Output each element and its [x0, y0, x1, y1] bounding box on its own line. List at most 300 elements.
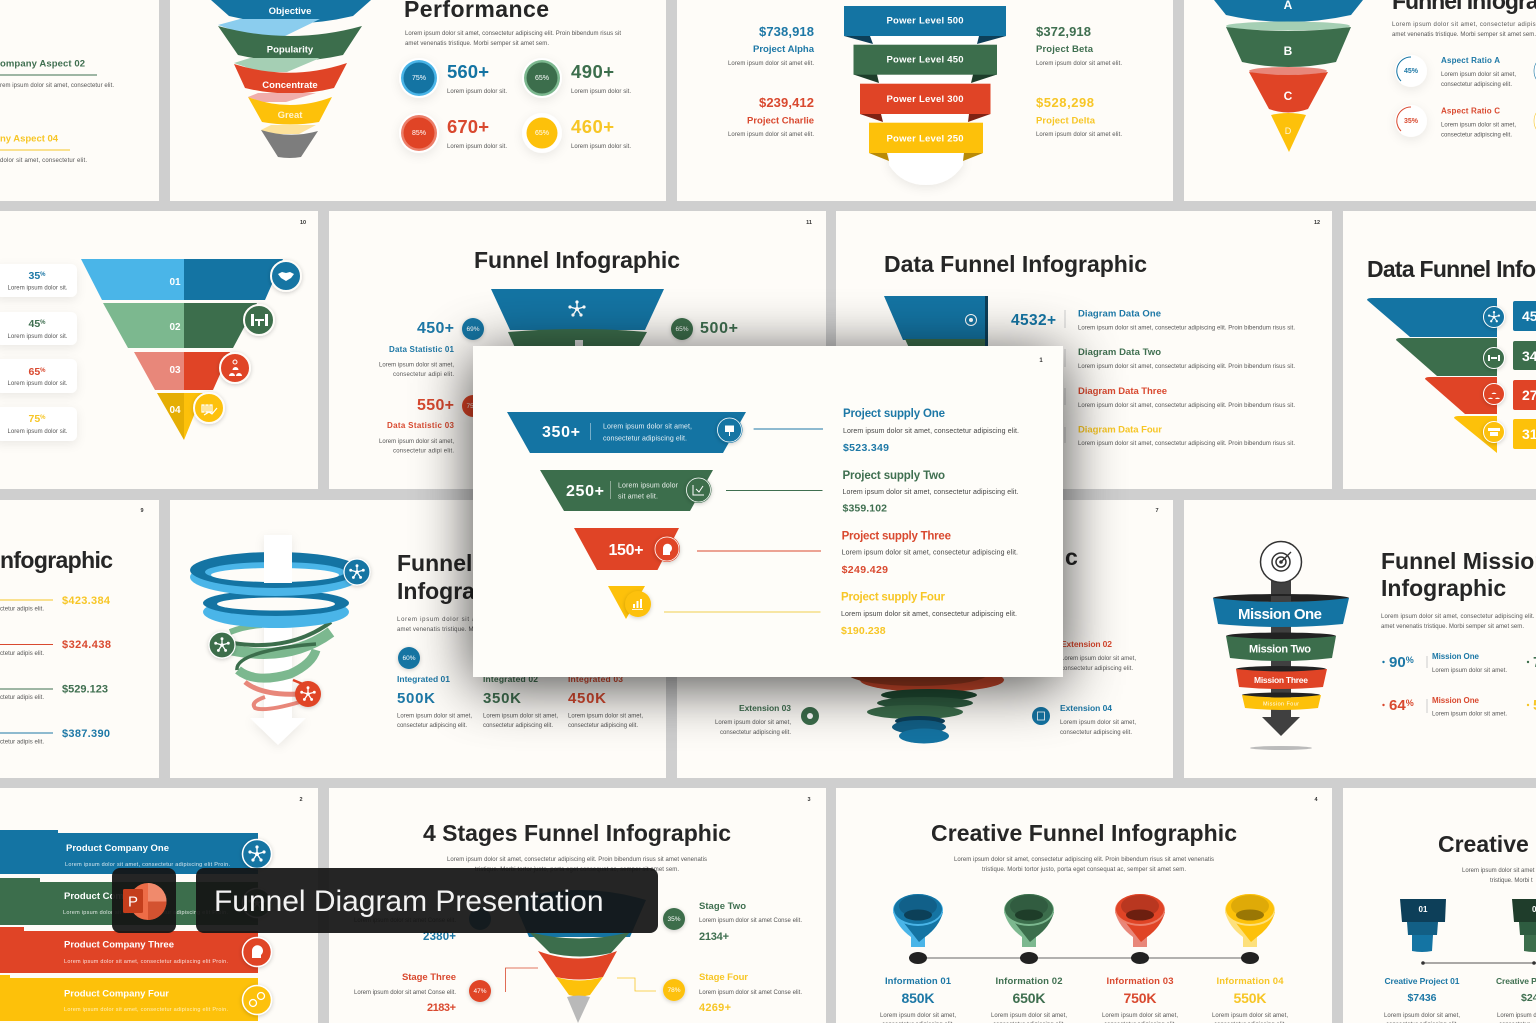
- stat: 670+: Lorem ipsum dolor sit.: [447, 144, 507, 150]
- info: 04: Information 04: [1216, 976, 1284, 987]
- band: product company two: [0, 878, 258, 925]
- icon: presentation board: [716, 417, 742, 443]
- connector: blue: [754, 428, 823, 430]
- column: integrated 01: 500K: [397, 690, 435, 707]
- info: 01: [880, 976, 956, 1023]
- stage: two: [663, 901, 802, 943]
- panel: data funnel infographic slide: [836, 211, 1332, 489]
- text: project supply one: Project supply One: [843, 408, 945, 420]
- pill: 35 percent: Lorem ipsum dolor sit.: [8, 286, 68, 292]
- band: product company four: [0, 975, 258, 1021]
- stat: aspect ratio A: [1395, 55, 1516, 88]
- title: Data Funnel Infographic: [884, 251, 1147, 277]
- icons on wedges: [1484, 306, 1504, 442]
- funnel: mission bands: Mission Two: [1249, 644, 1311, 656]
- funnel: four stages: [513, 890, 646, 1023]
- funnel: four split layers: 02: [169, 322, 181, 333]
- timeline dots: [909, 952, 1259, 964]
- stepped funnel: 01: [1400, 899, 1446, 952]
- block: project delta: $528,298: [1036, 95, 1094, 110]
- icon: target: [1260, 542, 1302, 582]
- stage: two: 2134+: [699, 931, 729, 943]
- title: Funnel Infographic: [474, 247, 680, 273]
- text: intro: [1462, 868, 1535, 884]
- stat: aspect ratio C: Lorem ipsum dolor sit amet,: [1441, 122, 1516, 128]
- row: red price: ctetur adipis elit.: [0, 651, 44, 657]
- text: intro: [954, 857, 1214, 873]
- funnel icon: blue: [893, 894, 943, 947]
- stat: aspect ratio C: Aspect Ratio C: [1441, 106, 1500, 116]
- text: intro: Lorem ipsum dolor sit amet, consectetur elit.: [397, 617, 547, 623]
- text: project supply three: [842, 530, 1018, 576]
- panel: featured project supply slide: [473, 346, 1063, 677]
- stat: 450+: consectetur adipi elit.: [393, 372, 454, 378]
- heading: company aspect 02: ompany Aspect 02: [0, 58, 85, 70]
- page number: 7: [1155, 508, 1159, 514]
- stat: 550+: 75%: [466, 403, 480, 410]
- funnel: ribbon levels: Power Level 450: [886, 54, 964, 66]
- stage: three: Stage Three: [402, 972, 456, 983]
- funnel layer: 250+: sit amet elit.: [618, 494, 658, 500]
- rule: aspect 04: [0, 149, 70, 151]
- funnel: five curved layers: Objective: [269, 6, 311, 17]
- project: 02 cropped: [1496, 976, 1536, 1023]
- page number: 4: [1314, 797, 1318, 803]
- info: 03: Lorem ipsum dolor sit amet,: [1102, 1013, 1178, 1019]
- stat: 64 percent: Lorem ipsum dolor sit amet.: [1432, 712, 1507, 718]
- band: product company one: Product Company One: [66, 843, 169, 854]
- stage: one: Lorem ipsum dolor sit amet Conse elit.: [354, 918, 456, 924]
- funnel: four split layers: 01: [169, 277, 181, 288]
- band: product company three: Lorem ipsum dolor sit amet, consectetur adipiscing elit Proin.: [64, 959, 228, 965]
- funnel layer: 350+: consectetur adipiscing elit.: [603, 436, 687, 442]
- list: diagram data: [1065, 308, 1295, 447]
- stage: four: Stage Four: [699, 972, 748, 983]
- band: product company one: Lorem ipsum dolor sit amet, consectetur adipiscing elit Proin.: [65, 862, 230, 868]
- funnel layer: 350+: Lorem ipsum dolor sit amet,: [603, 424, 692, 430]
- stat: aspect ratio A: Aspect Ratio A: [1441, 56, 1500, 65]
- icon: team location: [220, 353, 250, 383]
- column: integrated 02: 350K: [483, 690, 521, 707]
- panel: infographic price list fragment: [0, 500, 159, 778]
- pill: 65 percent: %: [40, 368, 46, 374]
- info: 02: Information 02: [996, 976, 1062, 987]
- funnel: ribbon levels: Power Level 500: [886, 16, 964, 26]
- stat: 460+: 65%: [535, 130, 549, 137]
- funnel: mission bands: Mission Four: [1263, 702, 1299, 708]
- panel: performance funnel slide: [170, 0, 666, 201]
- band: product company three: Product Company Three: [64, 940, 174, 950]
- panel: product company slide: [0, 788, 318, 1023]
- stat: 490+: [522, 58, 631, 98]
- stat: 500+: 65%: [675, 326, 689, 333]
- stat rings cropped at right edge: [1534, 55, 1536, 137]
- funnel icon: red: [1115, 894, 1165, 947]
- text: intro: [1392, 22, 1536, 38]
- funnel stem and arrow: [1262, 580, 1300, 736]
- funnel: mission bands: [1213, 594, 1349, 710]
- title: Data Funnel Info: [1367, 256, 1536, 282]
- info: 04: Lorem ipsum dolor sit amet,: [1212, 1013, 1288, 1019]
- stat: 64 percent: Mission One: [1432, 696, 1480, 705]
- funnel: ribbon levels: Power Level 250: [886, 134, 964, 144]
- column: integrated 02: Lorem ipsum dolor sit amet,: [483, 714, 558, 720]
- stat: 550+: consectetur adipi elit.: [393, 448, 454, 454]
- title fragment: c: [1065, 544, 1078, 570]
- panel: percentage funnel slide: [0, 211, 318, 489]
- stat: 550+: Lorem ipsum dolor sit amet,: [379, 439, 454, 445]
- funnel: four split layers: 03: [169, 365, 181, 376]
- stepped funnel: 01: 01: [1419, 905, 1428, 914]
- connector: red: [697, 550, 821, 552]
- stat: 560+: Lorem ipsum dolor sit.: [447, 89, 507, 95]
- text: intro: tristique. Morbi tortor justo, porta eget consequat ac, semper sit amet sem.: [475, 867, 679, 873]
- stage: three: 47%: [473, 988, 487, 995]
- block: extension 03: consectetur adipiscing elit.: [720, 730, 791, 736]
- icon: extension 04: [1032, 707, 1050, 725]
- text: intro: tristique. Morbi tortor justo, porta eget consequat ac, semper sit amet sem.: [982, 867, 1186, 873]
- pill: 75 percent: %: [40, 415, 46, 421]
- text: intro: amet venenatis tristique. Morbi semper sit amet sem.: [1381, 624, 1524, 630]
- column: integrated 03: Lorem ipsum dolor sit amet,: [568, 714, 643, 720]
- block: project beta: [1036, 24, 1122, 67]
- block: project delta: Project Delta: [1036, 116, 1096, 126]
- block: project charlie: Project Charlie: [747, 116, 814, 126]
- page number: 12: [1314, 220, 1320, 226]
- stat: 90 percent: Lorem ipsum dolor sit amet.: [1432, 668, 1507, 674]
- funnel: ribbon levels: Power Level 300: [886, 94, 964, 105]
- panel: spiral funnel slide: [170, 500, 666, 778]
- info: 02: Lorem ipsum dolor sit amet,: [991, 1013, 1067, 1019]
- funnel layer: 150+: [574, 528, 680, 570]
- stat: 450+: Data Statistic 01: [389, 345, 455, 354]
- stat: 64 percent: 64: [1389, 697, 1406, 714]
- stat: 64 percent: %: [1406, 698, 1414, 708]
- block: extension 04: consectetur adipiscing elit.: [1060, 730, 1132, 736]
- row: green price: $529.123: [62, 684, 108, 696]
- pill: 45 percent: %: [40, 320, 46, 326]
- text: project supply one: $523.349: [843, 442, 889, 454]
- funnel layer: 250+: 250+: [566, 483, 604, 500]
- text: intro: [447, 857, 707, 873]
- title: [397, 550, 522, 604]
- stat: aspect ratio C: consectetur adipiscing elit.: [1441, 132, 1512, 138]
- stat: 450+: 450+: [417, 320, 454, 337]
- project: 01: Lorem ipsum dolor sit amet,: [1384, 1013, 1460, 1019]
- text: intro: Lorem ipsum dolor sit amet, consectetur adipiscing elit. Proin bibendum risus sit: [405, 31, 621, 37]
- text: intro: amet venenatis tristique. Morbi semper sit amet sem.: [397, 627, 547, 633]
- info: 04: 550K: [1234, 990, 1266, 1006]
- funnel: four split layers: 04: [169, 405, 181, 416]
- funnel: five curved layers: Great: [278, 110, 303, 121]
- list: diagram data: Diagram Data Four: [1078, 424, 1162, 436]
- stat: 670+: [399, 113, 507, 153]
- funnel icon: yellow: [1225, 894, 1275, 947]
- row: blue price: $387.390: [62, 728, 110, 740]
- stat: 460+: Lorem ipsum dolor sit.: [571, 144, 631, 150]
- stat: 500+: 500+: [700, 320, 738, 337]
- info: 03: Information 03: [1106, 976, 1174, 987]
- stat: 550+: Data Statistic 03: [387, 421, 455, 430]
- band: product company one: [0, 830, 258, 874]
- list: diagram data: Lorem ipsum dolor sit amet, consectetur adipiscing elit. Proin bibendum risus sit.: [1078, 441, 1295, 447]
- funnel layer: yellow wedge: [608, 586, 651, 619]
- stacked disc funnel: [847, 660, 1004, 744]
- stat: 490+: 490+: [571, 61, 614, 82]
- block: extension 04: [1060, 703, 1136, 736]
- block: extension 02: Lorem ipsum dolor sit amet,: [1061, 656, 1136, 662]
- block: project beta: Lorem ipsum dolor sit amet elit.: [1036, 61, 1122, 67]
- column: integrated 02: consectetur adipiscing elit.: [483, 723, 553, 729]
- funnel layer: 250+: Lorem ipsum dolor: [618, 482, 679, 490]
- text: intro: [1381, 614, 1536, 630]
- icon: gears yellow: [242, 986, 272, 1014]
- stage: three: Lorem ipsum dolor sit amet Conse elit.: [354, 990, 456, 996]
- stats cropped at right edge: [1527, 654, 1536, 714]
- band: product company four: Lorem ipsum dolor sit amet, consectetur adipiscing elit Proin.: [64, 1007, 228, 1013]
- text: intro: Lorem ipsum dolor sit amet: [1462, 868, 1535, 874]
- stage: one: 2380+: [423, 931, 456, 943]
- title: Infographic: [397, 578, 522, 604]
- funnel: five curved layers: [211, 0, 371, 158]
- stat: 450+: [379, 318, 484, 378]
- stat: 90 percent: %: [1406, 655, 1414, 665]
- page number: 2: [299, 797, 303, 803]
- block: project beta: Project Beta: [1036, 44, 1094, 55]
- text: aspect 02 body: rem ipsum dolor sit amet, consectetur elit.: [0, 83, 114, 89]
- funnel: mission bands: Mission Three: [1254, 675, 1308, 685]
- list: diagram data: Diagram Data Two: [1078, 347, 1161, 358]
- title: [1381, 548, 1536, 601]
- block: extension 04: Extension 04: [1060, 703, 1112, 713]
- arrow: white downward: [250, 535, 306, 745]
- pill: 35 percent: [0, 264, 77, 297]
- list: diagram data: Diagram Data Three: [1078, 386, 1167, 397]
- info: 04: [1212, 976, 1288, 1023]
- shadow of featured slide: [473, 355, 1063, 685]
- panel: company aspects slide fragment: [0, 0, 159, 201]
- block: extension 03: Extension 03: [739, 703, 791, 713]
- pill: 45 percent: 45: [28, 318, 40, 330]
- text: aspect 04 body: dolor sit amet, consectetur elit.: [0, 158, 87, 164]
- connector: yellow: [664, 611, 820, 613]
- funnel layer: 350+: [507, 412, 746, 453]
- panel: 4 stages funnel slide: [329, 788, 826, 1023]
- stat: 490+: Lorem ipsum dolor sit.: [571, 89, 631, 95]
- stage: four: 4269+: [699, 1002, 731, 1014]
- text: project supply two: Project supply Two: [842, 470, 945, 482]
- project: 01: [1384, 976, 1460, 1023]
- pill: 65 percent: 65: [28, 366, 40, 378]
- block: extension 04: Lorem ipsum dolor sit amet,: [1060, 720, 1136, 726]
- column: integrated 01: Integrated 01: [397, 674, 450, 684]
- stat: 90 percent: 90: [1389, 654, 1406, 671]
- title: 4 Stages Funnel Infographic: [423, 820, 731, 846]
- row: red price: [0, 639, 111, 657]
- page number: 9: [140, 508, 144, 514]
- column: integrated 01: Lorem ipsum dolor sit amet,: [397, 714, 472, 720]
- page number: 1: [1039, 358, 1043, 364]
- text: intro: tristique. Morbi t: [1490, 878, 1533, 884]
- list: diagram data: Lorem ipsum dolor sit amet, consectetur adipiscing elit. Proin bibendum risus sit.: [1078, 326, 1295, 332]
- text: project supply four: [841, 592, 1017, 637]
- block: project alpha: Lorem ipsum dolor sit amet elit.: [728, 61, 814, 67]
- column: integrated 03: consectetur adipiscing elit.: [568, 723, 638, 729]
- stage: four: [663, 972, 802, 1014]
- stat: aspect ratio A: Lorem ipsum dolor sit amet,: [1441, 72, 1516, 78]
- info: 02: [991, 976, 1067, 1023]
- pill: 35 percent: %: [40, 272, 46, 278]
- funnel: mission bands: Mission One: [1238, 606, 1322, 623]
- text: project supply three: Lorem ipsum dolor sit amet, consectetur adipiscing elit.: [842, 550, 1018, 556]
- stage: four: Lorem ipsum dolor sit amet Conse elit.: [699, 990, 802, 996]
- stage: two: Stage Two: [699, 901, 746, 912]
- project: 01: Creative Project 01: [1384, 976, 1460, 986]
- block: extension 03: Lorem ipsum dolor sit amet,: [715, 720, 791, 726]
- icon: handshake: [271, 261, 301, 291]
- text: project supply two: $359.102: [842, 502, 887, 514]
- band: product company three: [0, 927, 258, 973]
- block: extension 02: Extension 02: [1061, 639, 1112, 649]
- info: 03: 750K: [1124, 990, 1156, 1006]
- row: green price: [0, 684, 108, 701]
- funnel: stepped wedges: [1367, 298, 1497, 453]
- stage: four: 78%: [667, 987, 681, 994]
- pill: 75 percent: [0, 407, 77, 441]
- pill: 75 percent: 75: [28, 413, 40, 425]
- icon: chart: [686, 477, 712, 503]
- block: extension 02: [1061, 639, 1136, 672]
- page number: 10: [300, 220, 306, 226]
- panel: extension funnel slide: [677, 500, 1173, 778]
- list: diagram data: Lorem ipsum dolor sit amet, consectetur adipiscing elit. Proin bibendum risus sit.: [1078, 403, 1295, 409]
- title bar: funnel diagram presentation: [196, 868, 658, 933]
- column: integrated 03: [568, 674, 643, 729]
- column: integrated 03: Integrated 03: [568, 674, 623, 684]
- value boxes: [1513, 301, 1536, 449]
- funnel: four split layers: [81, 259, 283, 440]
- stat: 64 percent: [1382, 696, 1507, 718]
- pill: 75 percent: Lorem ipsum dolor sit.: [8, 429, 68, 435]
- funnel: A to D: [1214, 0, 1363, 152]
- panel: creative funnel slide: [836, 788, 1332, 1023]
- panel: funnel infographic data statistic slide: [329, 211, 826, 489]
- column: integrated 01: [397, 674, 472, 729]
- row: yellow price: $423.384: [62, 595, 111, 607]
- info: 01: 850K: [902, 990, 934, 1006]
- pill: 45 percent: Lorem ipsum dolor sit.: [8, 334, 68, 340]
- title: Creative Funnel Infographic: [931, 820, 1237, 846]
- text: project supply three: Project supply Three: [842, 530, 951, 542]
- funnel: five curved layers: Popularity: [267, 44, 314, 56]
- column: integrated 01: consectetur adipiscing elit.: [397, 723, 467, 729]
- row: yellow price: ctetur adipis elit.: [0, 606, 44, 612]
- stage: two: Lorem ipsum dolor sit amet Conse elit.: [699, 918, 802, 924]
- icon: meeting: [244, 305, 274, 335]
- funnel: [491, 289, 664, 350]
- icon: extension 03: [801, 707, 819, 725]
- text: project supply two: [842, 470, 1019, 514]
- badge: powerpoint icon: P: [128, 894, 138, 910]
- funnel layer: 150+: 150+: [608, 542, 644, 559]
- text: intro: Lorem ipsum dolor sit amet, consectetur adipiscing elit. Proin bibendum risus sit amet venenatis: [447, 857, 707, 863]
- stat: 450+: 69%: [466, 326, 480, 333]
- icon: bar chart: [625, 591, 651, 617]
- column: integrated 02: [483, 674, 558, 729]
- block: project alpha: $738,918: [759, 24, 814, 39]
- block: project beta: $372,918: [1036, 24, 1091, 39]
- list: diagram data: Diagram Data One: [1078, 308, 1161, 320]
- stat: 550+: [379, 395, 484, 454]
- funnel layer: 250+: [540, 470, 713, 511]
- text: intro: Lorem ipsum dolor sit amet, consectetur adipiscing elit. Proin bibendum risus sit amet venenatis: [954, 857, 1214, 863]
- stat: 560+: 75%: [412, 75, 426, 82]
- stat: 670+: 670+: [447, 116, 489, 137]
- block: extension 03: [715, 703, 791, 736]
- list: diagram data: Lorem ipsum dolor sit amet, consectetur adipiscing elit. Proin bibendum risus sit.: [1078, 364, 1295, 370]
- stage: one: [354, 908, 491, 943]
- pill: 35 percent: 35: [28, 270, 40, 282]
- timeline line: [918, 957, 1250, 959]
- text: project supply two: Lorem ipsum dolor sit amet, consectetur adipiscing elit.: [842, 489, 1019, 496]
- band: product company two: Product Company Two: [64, 891, 167, 902]
- block: project alpha: [728, 24, 815, 67]
- stat: 670+: 85%: [412, 130, 426, 137]
- funnel icon: green: [1004, 894, 1054, 947]
- stat: 500+: [671, 318, 738, 340]
- row: yellow price: [0, 595, 111, 612]
- project: 01: $7436: [1408, 992, 1437, 1004]
- pill: 65 percent: Lorem ipsum dolor sit.: [8, 381, 68, 387]
- block: project delta: Lorem ipsum dolor sit amet elit.: [1036, 132, 1122, 138]
- band: product company four: Product Company Four: [64, 988, 169, 1000]
- funnel: A to D: D: [1285, 126, 1292, 136]
- icon: blue network node: [344, 559, 370, 585]
- text: intro: [405, 31, 621, 47]
- panel: data funnel infographic cropped slide: [1343, 211, 1536, 489]
- info: 02: 650K: [1012, 990, 1046, 1006]
- stat: 450+: Lorem ipsum dolor sit amet,: [379, 362, 454, 368]
- connector: red: [506, 968, 538, 992]
- row: green price: ctetur adipis elit.: [0, 695, 44, 701]
- text: project supply one: [843, 408, 1019, 454]
- text: intro: amet venenatis tristique. Morbi semper sit amet sem.: [405, 41, 549, 47]
- stat: 560+: 560+: [447, 61, 489, 82]
- spiral funnel: [190, 535, 360, 709]
- connector: green: [726, 490, 822, 492]
- heading: company aspect 04: ny Aspect 04: [0, 134, 59, 144]
- info: 01: Information 01: [885, 976, 952, 987]
- panel: creative cropped slide: [1343, 788, 1536, 1023]
- title fragment: nfographic: [0, 547, 113, 573]
- pill: 65 percent: [0, 359, 77, 393]
- icon: group growth: [194, 393, 224, 423]
- icon: network blue: [242, 840, 272, 868]
- stat: 560+: [399, 58, 507, 98]
- block: project charlie: [728, 95, 814, 138]
- icon: head: [654, 536, 680, 562]
- block: project delta: [1036, 95, 1122, 138]
- ground shadow: [1250, 746, 1312, 750]
- row: blue price: [0, 728, 110, 746]
- info: 01: Lorem ipsum dolor sit amet,: [880, 1013, 956, 1019]
- text: project supply one: Lorem ipsum dolor sit amet, consectetur adipiscing elit.: [843, 428, 1019, 435]
- stepped funnel: 02 cropped: [1512, 899, 1536, 952]
- row: red price: $324.438: [62, 639, 111, 651]
- icon: network green: [242, 888, 272, 918]
- text: project supply four: Lorem ipsum dolor sit amet, consectetur adipiscing elit.: [841, 611, 1017, 618]
- funnel layer: 350+: 350+: [542, 424, 580, 441]
